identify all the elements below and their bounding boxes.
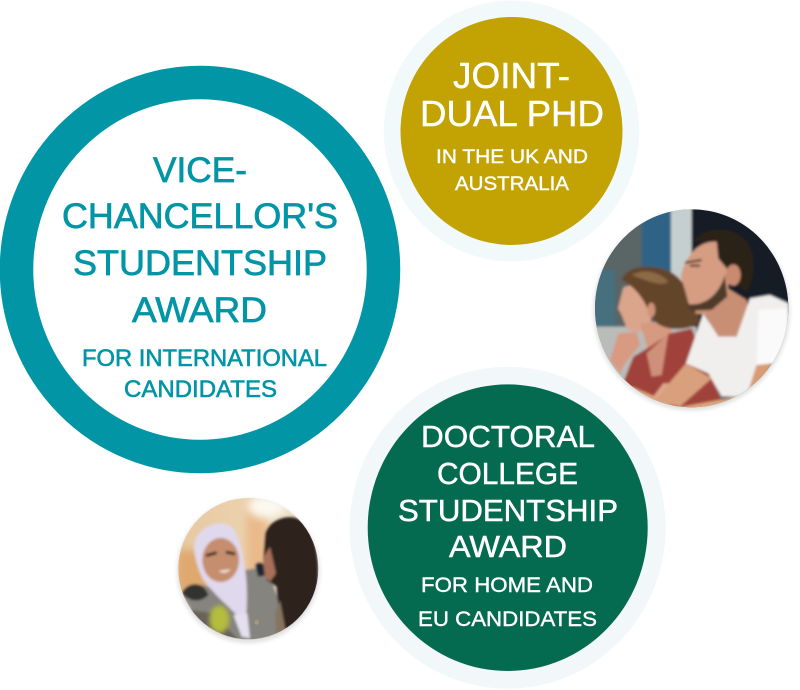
heading: Vice-Chancellor's Studentship Award <box>62 151 338 330</box>
heading: Doctoral College Studentship Award: AWARD <box>449 529 567 564</box>
photo: student in a headscarf talking with a friend <box>176 498 321 644</box>
text: in the UK and Australia <box>436 146 588 195</box>
panel: Vice-Chancellor's Studentship Award <box>16 82 384 456</box>
text: in the UK and Australia: AUSTRALIA <box>455 173 569 195</box>
heading: Vice-Chancellor's Studentship Award: VICE- <box>153 151 247 190</box>
photo: two students listening in a lecture <box>590 207 798 417</box>
text: for international candidates: FOR INTERNATIONAL <box>82 345 327 372</box>
woman <box>610 332 640 373</box>
coat <box>182 567 283 643</box>
heading: Vice-Chancellor's Studentship Award: STUDENTSHIP <box>73 244 327 283</box>
text: for international candidates <box>82 345 327 403</box>
heading: Joint-Dual PhD: JOINT- <box>453 55 570 96</box>
heading: Doctoral College Studentship Award: STUDENTSHIP <box>398 493 618 528</box>
panel: Doctoral College Studentship Award <box>350 367 666 689</box>
panel: Joint-Dual PhD <box>384 0 639 262</box>
text: in the UK and Australia: IN THE UK AND <box>436 146 588 168</box>
heading: Vice-Chancellor's Studentship Award: AWARD <box>132 291 267 330</box>
text: for home and EU candidates: EU CANDIDATES <box>418 607 597 631</box>
text: for international candidates: CANDIDATES <box>124 376 277 403</box>
friend hair <box>263 517 318 630</box>
text: for home and EU candidates <box>418 573 597 631</box>
text: for home and EU candidates: FOR HOME AND <box>421 573 593 597</box>
heading: Joint-Dual PhD <box>420 55 604 134</box>
heading: Doctoral College Studentship Award: COLLEGE <box>437 456 578 491</box>
heading: Vice-Chancellor's Studentship Award: CHANCELLOR'S <box>62 197 338 236</box>
man <box>695 283 750 338</box>
headscarf <box>194 523 247 615</box>
heading: Doctoral College Studentship Award: DOCTORAL <box>421 419 595 454</box>
heading: Doctoral College Studentship Award <box>398 419 618 564</box>
heading: Joint-Dual PhD: DUAL PHD <box>420 93 604 134</box>
